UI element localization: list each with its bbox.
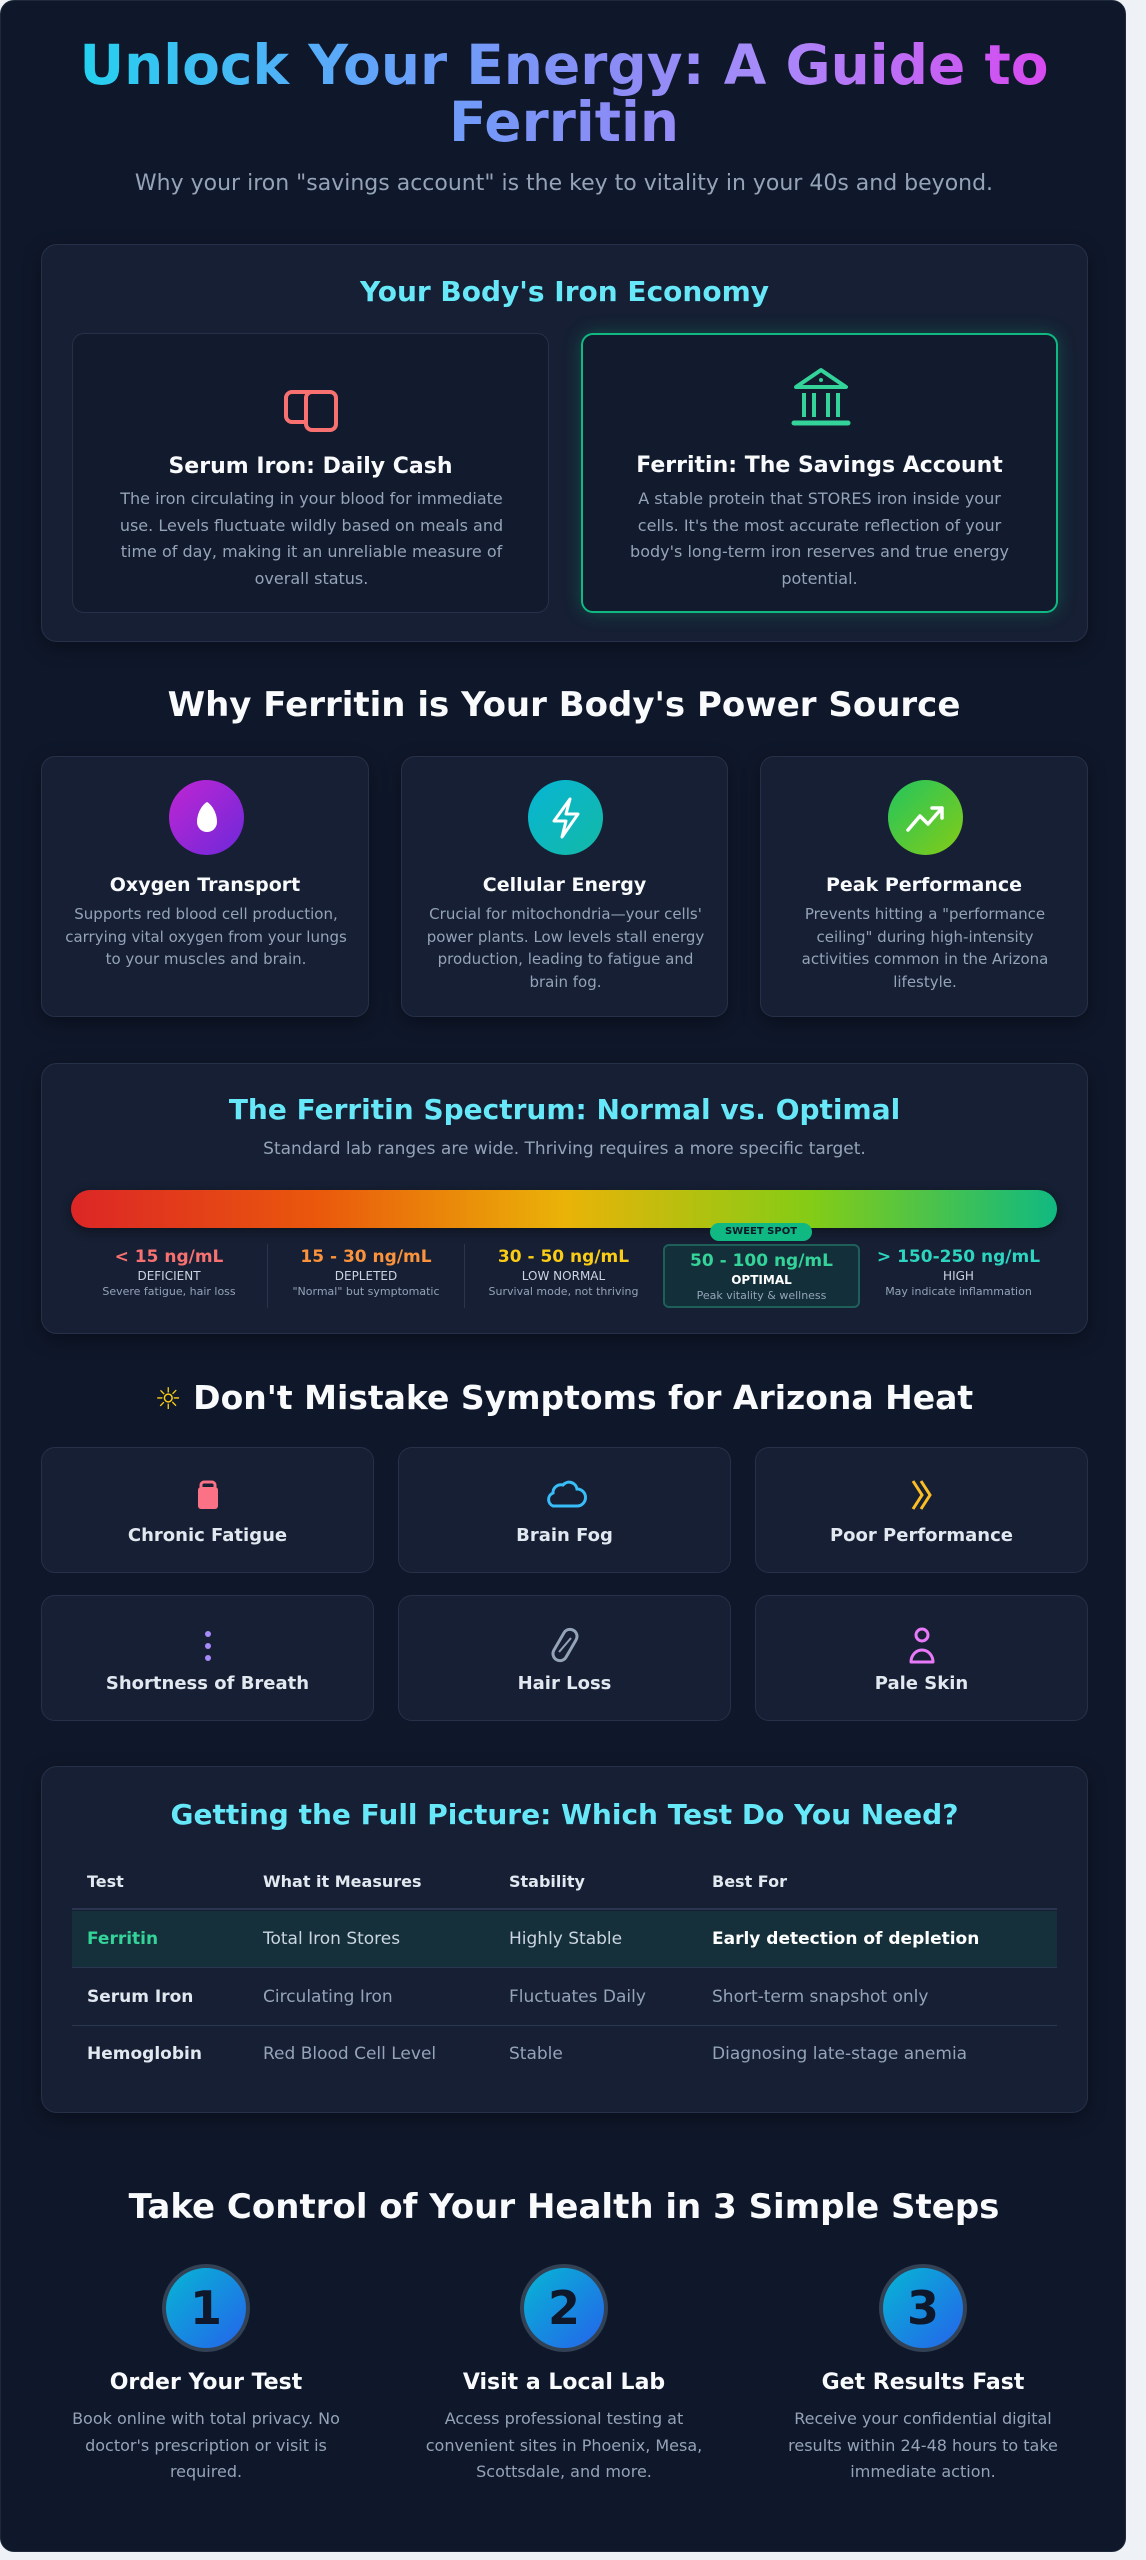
card text: A stable protein that STORES iron inside your cells. It's the most accurate reflection of your body's long-term iron reserves and true energy potential. — [630, 489, 1009, 588]
title — [66, 37, 1062, 151]
range: depleted: 15 - 30 ng/mL — [300, 1247, 432, 1267]
step text: Access professional testing at convenient sites in Phoenix, Mesa, Scottsdale, and more. — [426, 2409, 702, 2481]
table — [72, 1872, 1057, 2064]
heading: symptoms: ☼ Don't Mistake Symptoms for Arizona Heat — [155, 1378, 973, 1417]
row: serum iron — [72, 1969, 1057, 2026]
heading: iron economy: Your Body's Iron Economy — [360, 275, 769, 308]
step 3 — [788, 2264, 1058, 2481]
symptom: poor performance: Poor Performance — [830, 1525, 1013, 1546]
number circle — [162, 2264, 250, 2352]
text: Crucial for mitochondria—your cells' power plants. Low levels stall energy production, leading to fatigue and brain fog. — [427, 905, 704, 990]
heading: which test: Getting the Full Picture: Which Test Do You Need? — [171, 1798, 958, 1831]
badge: sweet spot — [710, 1223, 812, 1241]
row: ferritin: Highly Stable — [509, 1929, 622, 1949]
icon: cash — [284, 390, 338, 432]
header row: Stability — [509, 1872, 585, 1891]
card: peak performance — [760, 756, 1088, 1017]
number circle — [879, 2264, 967, 2352]
row: ferritin: Total Iron Stores — [263, 1929, 400, 1949]
range: depleted — [268, 1244, 465, 1308]
row: hemoglobin: Red Blood Cell Level — [263, 2044, 436, 2064]
card title: Serum Iron: Daily Cash — [168, 454, 453, 479]
subtitle: Standard lab ranges are wide. Thriving requires a more specific target. — [263, 1139, 866, 1159]
title: Ferritin — [449, 90, 679, 154]
range: deficient: Severe fatigue, hair loss — [102, 1285, 236, 1298]
card text: The iron circulating in your blood for immediate use. Levels fluctuate wildly based on meals and time of day, making it an unreliable measure of overall status. — [120, 489, 503, 588]
subtitle: Why your iron "savings account" is the key to vitality in your 40s and beyond. — [135, 171, 993, 196]
title: Cellular Energy — [483, 874, 646, 896]
row: serum iron: Serum Iron — [87, 1987, 193, 2007]
step title: Get Results Fast — [822, 2370, 1024, 2395]
symptom: pale skin — [755, 1595, 1088, 1721]
range: depleted: "Normal" but symptomatic — [292, 1285, 440, 1298]
range: low normal — [489, 1247, 638, 1298]
number circle: 1 — [190, 2281, 222, 2335]
symptom: shortness of breath — [41, 1595, 374, 1721]
text: Prevents hitting a "performance ceiling" during high-intensity activities common in the Arizona lifestyle. — [802, 905, 1048, 990]
heading: spectrum: The Ferritin Spectrum: Normal vs. Optimal — [229, 1093, 900, 1126]
card: cellular energy — [401, 756, 728, 1017]
range: deficient: < 15 ng/mL — [115, 1247, 223, 1267]
icon: drop circle — [169, 780, 244, 855]
panel: ferritin spectrum — [41, 1063, 1088, 1334]
range: deficient — [71, 1244, 268, 1308]
header row: Best For — [712, 1872, 787, 1891]
title: Unlock Your Energy: A Guide to — [79, 33, 1049, 97]
header row: Test — [87, 1872, 124, 1891]
range: low normal: 30 - 50 ng/mL — [498, 1247, 629, 1267]
card: ferritin — [581, 333, 1058, 613]
icon: bolt circle — [528, 780, 603, 855]
panel: iron economy — [41, 244, 1088, 642]
icon: trend circle — [888, 780, 963, 855]
card: serum iron — [72, 333, 549, 613]
symptom: poor performance — [755, 1447, 1088, 1573]
row: ferritin — [72, 1911, 1057, 1968]
step title: Visit a Local Lab — [463, 2370, 665, 2395]
row: hemoglobin: Diagnosing late-stage anemia — [712, 2044, 967, 2064]
range: low normal: LOW NORMAL — [522, 1269, 605, 1283]
row: serum iron: Short-term snapshot only — [712, 1987, 928, 2007]
step text: Book online with total privacy. No doctor's prescription or visit is required. — [72, 2409, 340, 2481]
range: low normal: Survival mode, not thriving — [489, 1285, 638, 1298]
row: serum iron: Fluctuates Daily — [509, 1987, 646, 2007]
symptom: brain fog: Brain Fog — [516, 1525, 613, 1546]
title: Oxygen Transport — [110, 874, 300, 896]
range: optimal: OPTIMAL — [731, 1273, 792, 1287]
range: high — [877, 1247, 1040, 1298]
symptom: chronic fatigue: Chronic Fatigue — [128, 1525, 287, 1546]
spectrum bar — [71, 1190, 1057, 1228]
step text: Receive your confidential digital results within 24-48 hours to take immediate action. — [788, 2409, 1058, 2481]
number circle: 2 — [548, 2281, 580, 2335]
symptom: hair loss — [398, 1595, 731, 1721]
row: hemoglobin: Hemoglobin — [87, 2044, 202, 2064]
symptom: pale skin: Pale Skin — [875, 1673, 968, 1694]
range: high: > 150-250 ng/mL — [877, 1247, 1040, 1267]
card: oxygen transport — [41, 756, 369, 1017]
card title: Ferritin: The Savings Account — [636, 453, 1003, 478]
range: depleted: DEPLETED — [335, 1269, 397, 1283]
range: high: HIGH — [943, 1269, 974, 1283]
range: optimal — [663, 1244, 860, 1308]
row: hemoglobin: Stable — [509, 2044, 563, 2064]
range: deficient: DEFICIENT — [137, 1269, 201, 1283]
icon: bank — [792, 368, 850, 426]
row: ferritin: Early detection of depletion — [712, 1929, 979, 1949]
number circle: 3 — [907, 2281, 939, 2335]
number circle — [520, 2264, 608, 2352]
header row: What it Measures — [263, 1872, 422, 1891]
panel: test comparison — [41, 1766, 1088, 2113]
header row — [72, 1853, 1057, 1910]
symptom: brain fog — [398, 1447, 731, 1573]
row: hemoglobin — [87, 2044, 967, 2064]
step 1 — [72, 2264, 340, 2481]
symptom: chronic fatigue — [41, 1447, 374, 1573]
range: optimal: 50 - 100 ng/mL — [690, 1251, 833, 1271]
heading: steps: Take Control of Your Health in 3 Simple Steps — [129, 2187, 999, 2227]
row: ferritin: Ferritin — [87, 1929, 158, 1949]
heading: power source: Why Ferritin is Your Body's Power Source — [168, 685, 960, 725]
badge: sweet spot: SWEET SPOT — [725, 1226, 797, 1237]
step title: Order Your Test — [110, 2370, 302, 2395]
step 2 — [426, 2264, 702, 2481]
symptom: hair loss: Hair Loss — [518, 1673, 611, 1694]
range: high: May indicate inflammation — [885, 1285, 1032, 1298]
range: optimal: Peak vitality & wellness — [697, 1289, 826, 1302]
title: Peak Performance — [826, 874, 1022, 896]
row: serum iron: Circulating Iron — [263, 1987, 393, 2007]
symptom: shortness of breath: Shortness of Breath — [106, 1673, 309, 1694]
text: Supports red blood cell production, carrying vital oxygen from your lungs to your muscles and brain. — [65, 905, 347, 968]
